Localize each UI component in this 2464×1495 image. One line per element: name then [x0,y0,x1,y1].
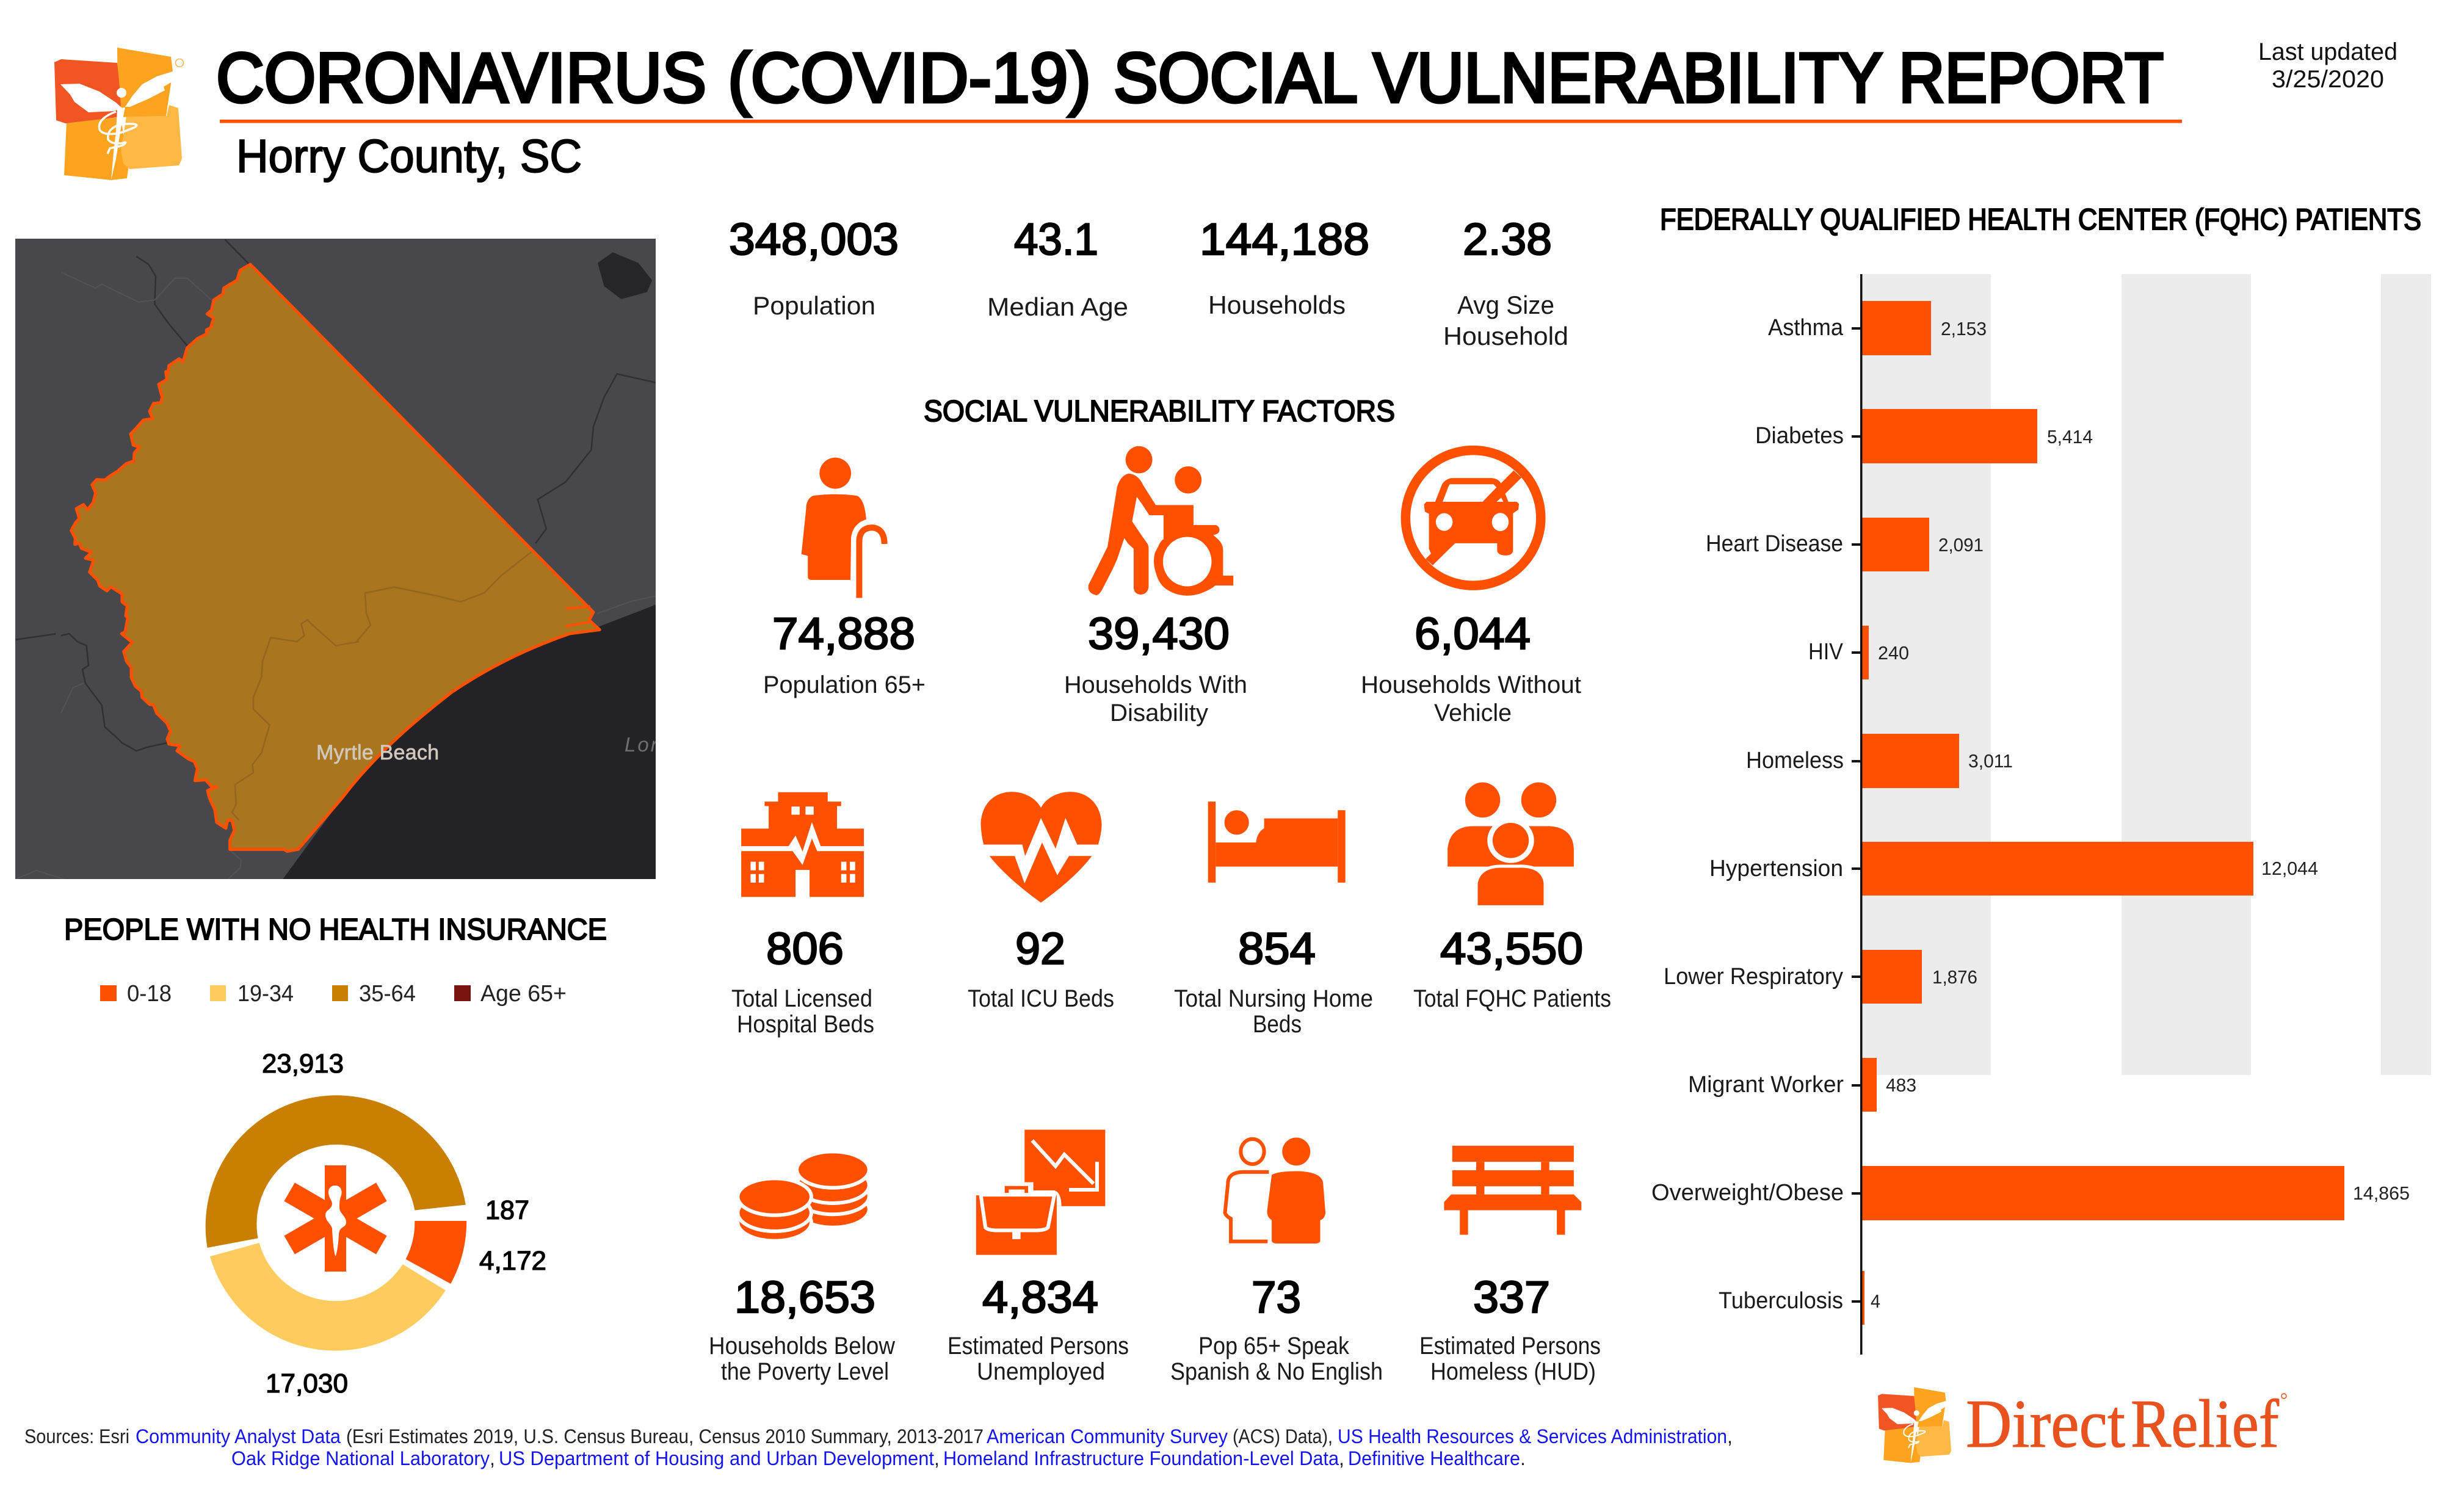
top statistic: avg household size: 2.38 [1463,215,1552,264]
map: Horry County: Myrtle Beach [316,741,439,764]
top statistic: population [729,215,899,320]
title: VULNERABILITY [1373,39,1883,117]
legend: age groups: Age 65+ [480,981,567,1007]
sources text: Sources: Esri [24,1425,129,1447]
sources text: US Health Resources & Services Administration [1338,1425,1727,1447]
factor: households without vehicle: Vehicle [1434,700,1512,726]
logo: Direct Relief wordmark [1878,1386,2286,1463]
title: (COVID-19) [728,39,1091,117]
icon: park bench [1444,1146,1581,1235]
title [216,39,2164,117]
factor: estimated unemployed: Estimated Persons [948,1333,1129,1359]
last updated date [2258,38,2397,93]
category labels: HIV [1808,639,1844,665]
sources text: (ACS) Data), [1233,1425,1333,1447]
subtitle: county name: Horry County, SC [236,131,582,183]
sources text: Oak Ridge National Laboratory [231,1447,490,1469]
category labels: Lower Respiratory [1664,964,1843,990]
sources text: , [1727,1425,1733,1447]
icon: family [1448,783,1574,907]
title underline [220,120,2182,123]
factor: households with disability [1064,446,1247,726]
factor: hospital beds: 806 [766,924,844,974]
sources text: Definitive Healthcare [1348,1447,1520,1469]
factor: households without vehicle: 6,044 [1415,609,1531,659]
factor: pop 65+ spanish no english [1170,1137,1383,1385]
icon: coin stacks [737,1151,869,1241]
donut value labels [262,1049,546,1399]
icon: briefcase and falling chart [976,1130,1105,1255]
title: SOCIAL [1114,39,1358,117]
factor: households with disability: Disability [1110,700,1208,726]
factor: population 65+: Population 65+ [763,671,926,698]
icon: elderly person with cane [802,458,885,598]
factor: pop 65+ spanish no english: 73 [1252,1273,1301,1322]
category labels: Tuberculosis [1719,1288,1843,1314]
category labels: Homeless [1746,748,1844,773]
category labels: Heart Disease [1706,531,1843,557]
factor: households with disability: Households With [1064,671,1247,698]
top statistic: median age: 43.1 [1014,215,1098,264]
top statistic: households [1200,215,1369,319]
bar value labels: 14,865 [2353,1182,2410,1204]
category labels [1651,315,1844,1314]
last updated date: 3/25/2020 [2272,66,2384,93]
bar value labels: 483 [1886,1074,1916,1096]
icon: Direct Relief emblem small [1878,1388,1951,1463]
donut value labels: 187 [485,1195,529,1225]
bar value labels: 240 [1878,642,1909,664]
donut chart: uninsured by age [206,1095,466,1351]
title: REPORT [1899,39,2164,117]
icon: bed [1208,802,1346,883]
legend: age groups: 19-34 [237,981,294,1007]
factor: pop 65+ spanish no english: Spanish & No English [1170,1358,1383,1385]
factor: estimated homeless: 337 [1473,1273,1550,1322]
axis line and ticks [1852,274,1862,1355]
map: Horry County: Long Bay [625,733,724,756]
bar value labels: 12,044 [2261,858,2318,879]
factor: estimated unemployed: 4,834 [982,1273,1098,1322]
sources text: Community Analyst Data [136,1425,341,1447]
factor: FQHC patients [1413,783,1611,1012]
icon: no car [1405,451,1541,585]
factor: nursing home beds: Beds [1253,1011,1302,1038]
sources text: , [934,1447,940,1469]
legend: age groups: 35-64 [359,981,416,1007]
legend: age groups [100,981,567,1007]
icon: hospital [741,792,864,897]
donut value labels: 23,913 [262,1049,344,1079]
factor: estimated homeless: Homeless (HUD) [1430,1358,1596,1385]
factor: pop 65+ spanish no english: Pop 65+ Speak [1198,1333,1350,1359]
bar value labels: 2,091 [1938,534,1984,556]
factor: estimated unemployed: Unemployed [977,1358,1105,1385]
bar value labels [1871,318,2410,1312]
title: CORONAVIRUS [216,39,706,117]
top statistic: median age: Median Age [987,292,1128,321]
top statistic: avg household size: Household [1443,322,1568,350]
factor: nursing home beds: Total Nursing Home [1174,985,1373,1012]
last updated date: Last updated [2258,38,2397,65]
factor: population 65+ [763,458,926,698]
factor: households below poverty: Households Below [709,1333,895,1359]
factor: households below poverty [709,1151,895,1385]
factor: estimated homeless: Estimated Persons [1419,1333,1601,1359]
sources text: US Department of Housing and Urban Development [499,1447,934,1469]
top statistic: households: 144,188 [1200,215,1369,264]
top statistic: population: 348,003 [729,215,899,264]
top statistic: avg household size [1443,215,1568,350]
logo: Direct Relief wordmark: Direct [1966,1386,2125,1462]
bar value labels: 4 [1871,1290,1880,1312]
heading: social vulnerability factors: SOCIAL VULNERABILITY FACTORS [924,395,1395,428]
factor: population 65+: 74,888 [772,609,915,659]
factor: hospital beds [731,792,874,1038]
factor: nursing home beds: 854 [1238,924,1316,974]
icon: star of life [284,1165,387,1272]
bar value labels: 1,876 [1932,966,1977,988]
heading: no health insurance: PEOPLE WITH NO HEALTH INSURANCE [64,913,607,946]
map: Horry County [15,239,724,879]
factor: FQHC patients: Total FQHC Patients [1413,985,1611,1012]
factor: hospital beds: Hospital Beds [737,1011,874,1038]
factor: hospital beds: Total Licensed [731,985,872,1012]
factor: households below poverty: 18,653 [734,1273,875,1322]
category labels: Hypertension [1709,856,1843,881]
donut value labels: 17,030 [266,1369,348,1399]
sources text: . [1520,1447,1526,1469]
sources text [24,1425,1733,1469]
factor: FQHC patients: 43,550 [1440,924,1583,974]
top statistic: population: Population [753,291,875,320]
sources text: American Community Survey [987,1425,1228,1447]
icon: caregiver and wheelchair [1089,446,1233,596]
logo: Direct Relief wordmark: Relief [2131,1386,2280,1462]
bar value labels: 3,011 [1968,750,2013,772]
factor: ICU beds: Total ICU Beds [968,985,1114,1012]
factor: ICU beds: 92 [1015,924,1065,974]
factor: nursing home beds [1174,802,1373,1038]
top statistic: median age [987,215,1128,321]
bar chart: FQHC patients by condition [1651,274,2431,1355]
top statistic: households: Households [1208,291,1346,319]
bar value labels: 2,153 [1941,318,1987,339]
bar value labels: 5,414 [2047,426,2093,447]
factor: households without vehicle [1361,451,1581,726]
category labels: Diabetes [1755,423,1844,449]
factor: households below poverty: the Poverty Level [721,1358,889,1385]
bars [1862,301,2344,1325]
icon: heart with pulse [980,792,1102,903]
factor: estimated homeless [1419,1146,1601,1385]
icon: two people [1225,1137,1325,1243]
sources text: Homeland Infrastructure Foundation-Level Data [943,1447,1339,1469]
category labels: Asthma [1768,315,1844,341]
factor: households with disability: 39,430 [1088,609,1230,659]
sources text: , [490,1447,495,1469]
legend: age groups: 0-18 [127,981,172,1007]
sources text: , [1339,1447,1344,1469]
category labels: Migrant Worker [1688,1072,1844,1098]
sources text: (Esri Estimates 2019, U.S. Census Bureau, Census 2010 Summary, 2013-2017 [346,1425,984,1447]
donut value labels: 4,172 [479,1246,546,1276]
logo: Direct Relief emblem [54,48,183,180]
factor: households without vehicle: Households Without [1361,671,1581,698]
factor: ICU beds [968,792,1114,1012]
factor: estimated unemployed [948,1130,1129,1385]
top statistic: avg household size: Avg Size [1457,291,1554,319]
category labels: Overweight/Obese [1651,1180,1844,1206]
